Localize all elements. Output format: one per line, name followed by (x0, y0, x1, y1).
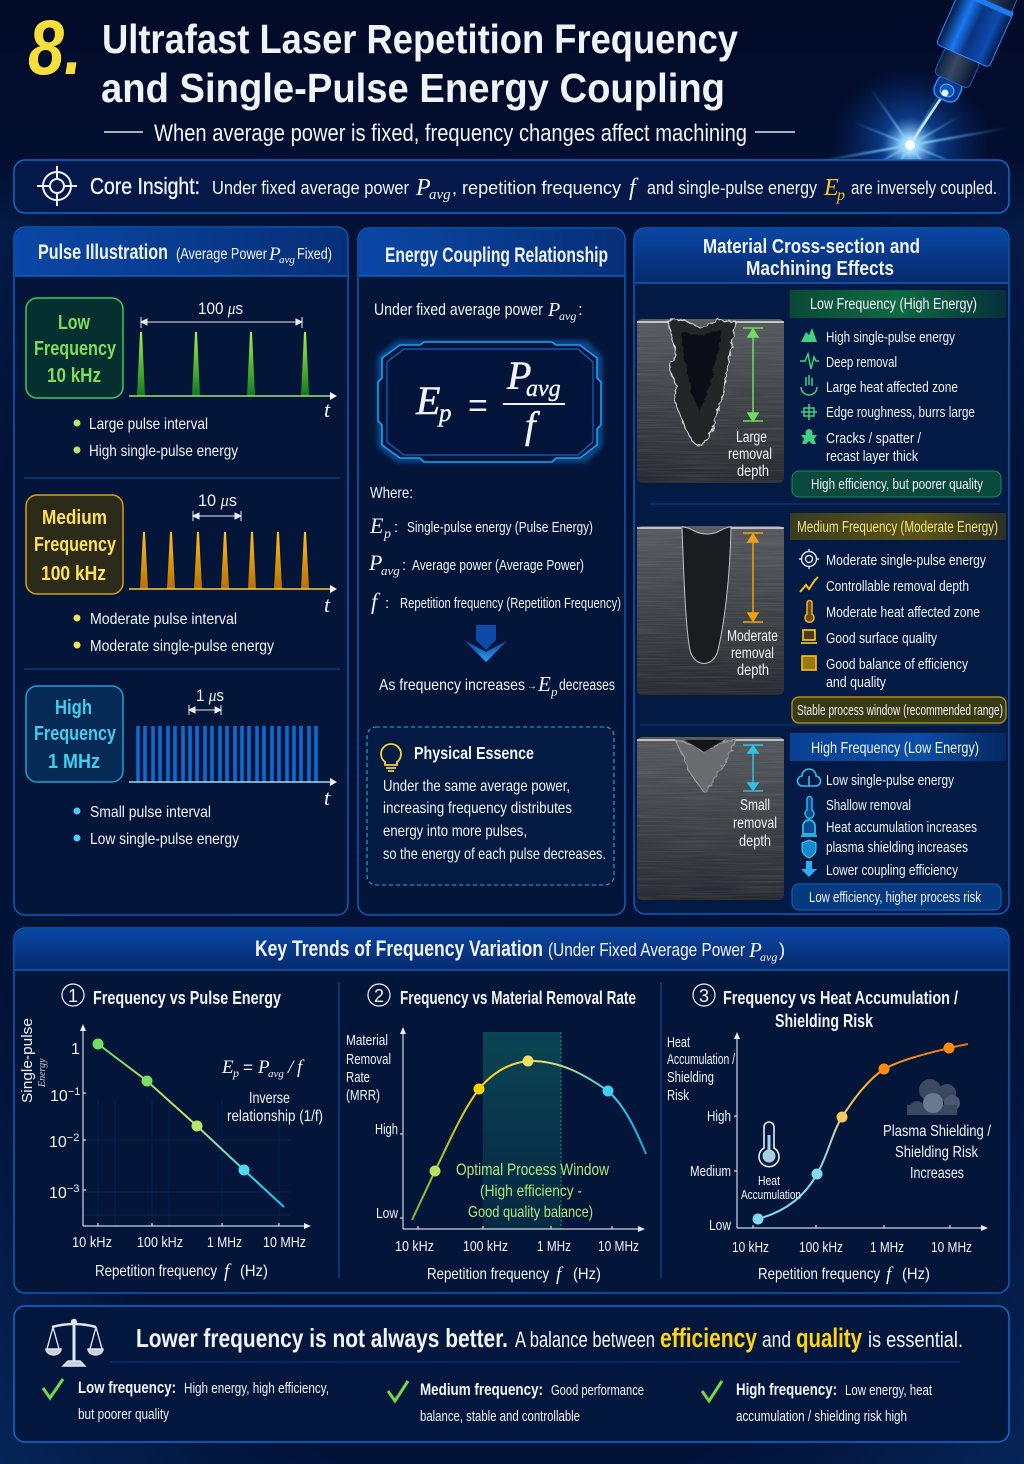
chart: frequency vs pulse energy: p (232, 1066, 239, 1080)
formula box (378, 342, 601, 462)
high frequency effects list: Low single-pulse energy (826, 772, 954, 789)
chart: frequency vs heat accumulation: Shielding (667, 1070, 714, 1086)
medium frequency label: Frequency (34, 534, 117, 556)
high frequency label: 1 MHz (48, 751, 100, 773)
formula box: avg (526, 376, 561, 402)
heading: key trends: Key Trends of Frequency Variation (255, 936, 543, 961)
chart: frequency vs heat accumulation: Shielding Risk (895, 1144, 978, 1161)
formula intro: Under fixed average power (374, 300, 543, 319)
conclusion headline: and (762, 1327, 791, 1352)
chart: frequency vs heat accumulation: Heat (758, 1173, 780, 1188)
subtitle: When average power is fixed, frequency changes affect machining (154, 120, 747, 147)
low frequency strip heading (790, 290, 1006, 318)
high frequency takeaway (702, 1380, 932, 1425)
frequency increases note (379, 672, 615, 699)
heading: pulse illustration: Pulse Illustration (38, 241, 168, 264)
conclusion headline: Lower frequency is not always better. (136, 1323, 508, 1353)
core insight text: E (823, 175, 839, 201)
icon: shield (802, 840, 816, 858)
core insight text (90, 173, 997, 204)
chart: frequency vs pulse energy: / (287, 1057, 295, 1078)
low frequency takeaway: Low frequency: (78, 1378, 176, 1397)
panel: key trends (14, 928, 1009, 1293)
low frequency effects list: Edge roughness, burrs large (826, 404, 975, 421)
cross-section: medium frequency (637, 526, 784, 695)
medium frequency effects list: Controllable removal depth (826, 578, 969, 595)
medium frequency pulse chart: 10 μs (198, 491, 237, 510)
medium frequency bullets (74, 611, 274, 655)
high frequency takeaway: High frequency: (736, 1380, 837, 1399)
high frequency strip heading (790, 733, 1006, 761)
icon: edge roughness (801, 404, 817, 420)
panel: material cross-section (634, 228, 1009, 914)
low frequency label (26, 298, 123, 398)
main title: and Single-Pulse Energy Coupling (101, 65, 725, 111)
cross-section: high frequency (637, 737, 784, 900)
chart: frequency vs pulse energy: f (224, 1261, 232, 1282)
low frequency effects list: Large heat affected zone (826, 379, 958, 396)
heading: key trends: P (748, 938, 762, 962)
chart: frequency vs heat accumulation: Shielding Risk (775, 1011, 874, 1031)
low frequency bullets: High single-pulse energy (89, 443, 238, 460)
chart: frequency vs material removal rate: Rate (346, 1069, 370, 1086)
high frequency pulse chart: t (324, 785, 331, 810)
cross-section: low frequency: removal (728, 446, 772, 463)
cross-section: high frequency: Small (740, 797, 770, 814)
icon: light bulb (381, 744, 401, 771)
high frequency bullets: Low single-pulse energy (90, 831, 239, 848)
medium frequency bullets: Moderate single-pulse energy (90, 638, 274, 655)
chart: frequency vs pulse energy: Energy (37, 1058, 48, 1088)
high frequency summary pill (792, 884, 1001, 910)
core insight text: repetition frequency (462, 177, 622, 198)
chart: frequency vs pulse energy: relationship (1/f) (227, 1108, 323, 1125)
chart: frequency vs pulse energy: 1 (68, 986, 78, 1006)
formula box: E (415, 378, 440, 423)
medium frequency label: 100 kHz (41, 563, 106, 585)
high frequency effects list: Shallow removal (826, 797, 911, 814)
heading: material cross-section: Material Cross-section and (703, 236, 920, 258)
chart: frequency vs heat accumulation: Heat (667, 1035, 690, 1051)
chart: frequency vs material removal rate: Repetition frequency (427, 1266, 549, 1283)
core insight text: f (629, 175, 639, 201)
chart: frequency vs pulse energy: Inverse (249, 1090, 290, 1107)
chart: frequency vs heat accumulation: Plasma Shielding / (883, 1123, 992, 1140)
chart: frequency vs material removal rate: Good quality balance) (468, 1204, 593, 1221)
heading: key trends: ) (779, 939, 785, 960)
medium frequency effects list: Moderate heat affected zone (826, 604, 980, 621)
icon: balance box (802, 656, 816, 670)
icon: cracks splatter (801, 429, 817, 444)
high frequency strip heading: High Frequency (Low Energy) (811, 740, 979, 757)
core insight text: p (836, 187, 845, 204)
core insight text: and single-pulse energy (647, 177, 818, 198)
medium frequency effects list (799, 549, 986, 691)
frequency increases note: decreases (559, 677, 615, 694)
chart: frequency vs heat accumulation: 3 (699, 986, 709, 1006)
low frequency bullets: Large pulse interval (89, 416, 208, 433)
chart: frequency vs pulse energy: Single-pulse (19, 1018, 36, 1103)
definitions (368, 485, 621, 614)
chart: frequency vs material removal rate: (MRR) (346, 1087, 380, 1104)
definitions: P (368, 550, 382, 575)
medium frequency effects list: Moderate single-pulse energy (826, 552, 986, 569)
high frequency takeaway: accumulation / shielding risk high (736, 1409, 907, 1425)
chart: frequency vs pulse energy: P (257, 1057, 270, 1078)
cross-section: medium frequency: depth (737, 662, 769, 679)
chart: frequency vs pulse energy: −3 (67, 1183, 79, 1195)
medium frequency strip heading (790, 513, 1006, 540)
icon: thermometer blue (805, 796, 814, 818)
high frequency label (26, 686, 123, 782)
chart: frequency vs material removal rate: (High efficiency - (480, 1183, 582, 1200)
cross-section: medium frequency: removal (731, 645, 774, 662)
low frequency label: 10 kHz (47, 365, 101, 387)
definitions: Where: (370, 485, 413, 502)
high frequency pulse chart (129, 686, 337, 810)
core insight text: avg (429, 187, 451, 203)
chart: frequency vs heat accumulation: f (886, 1264, 894, 1285)
chart: frequency vs heat accumulation: Medium (690, 1163, 731, 1180)
chart: frequency vs heat accumulation: Frequency vs Heat Accumulation / (723, 988, 958, 1008)
heading: pulse illustration (38, 241, 332, 266)
heading: material cross-section (703, 236, 920, 280)
icon: pulse wave (800, 354, 819, 369)
low frequency strip heading: Low Frequency (High Energy) (810, 296, 977, 313)
low frequency pulse chart: t (324, 397, 331, 422)
high frequency effects list: plasma shielding increases (826, 839, 968, 856)
chart: frequency vs material removal rate: Removal (346, 1051, 391, 1068)
heading: key trends (255, 936, 785, 964)
low frequency bullets (74, 416, 238, 460)
chart: frequency vs heat accumulation: 1 MHz (870, 1239, 904, 1256)
frequency increases note: p (550, 684, 558, 699)
chart: frequency vs heat accumulation: Risk (667, 1088, 690, 1104)
icon: balance scale (46, 1320, 103, 1366)
low frequency summary pill (792, 471, 1001, 497)
core insight text: Core Insight: (90, 173, 200, 199)
formula box: p (437, 400, 452, 427)
callout: physical essence (367, 727, 614, 885)
high frequency takeaway: Low energy, heat (845, 1383, 932, 1399)
conclusion headline (136, 1323, 963, 1353)
formula box: f (525, 405, 540, 447)
panel: conclusion (14, 1306, 1009, 1442)
medium frequency takeaway: balance, stable and controllable (420, 1409, 580, 1425)
chart: frequency vs material removal rate: High (375, 1121, 398, 1138)
chart: frequency vs pulse energy: avg (268, 1068, 284, 1080)
icon: thermometer (759, 1122, 779, 1167)
medium frequency label: Medium (42, 507, 107, 529)
icon: rising line (800, 577, 818, 592)
high frequency label: Frequency (34, 723, 117, 745)
frequency increases note: → (527, 681, 537, 692)
chart: frequency vs material removal rate: 10 MHz (598, 1238, 639, 1255)
high frequency effects list: Lower coupling efficiency (826, 862, 958, 879)
callout: physical essence: energy into more pulses, (383, 823, 527, 840)
chart: frequency vs pulse energy: 10 kHz (72, 1234, 112, 1251)
definitions: avg (381, 563, 400, 578)
callout: physical essence: Physical Essence (414, 743, 534, 763)
definitions: Repetition frequency (Repetition Frequency) (400, 595, 621, 612)
medium frequency pulse chart (129, 491, 337, 617)
chart: frequency vs heat accumulation: Low (709, 1217, 731, 1234)
medium frequency effects list: Good surface quality (826, 630, 937, 647)
chart: frequency vs pulse energy: E (221, 1057, 234, 1078)
icon: heat zone (801, 375, 817, 395)
chart: frequency vs pulse energy: = (243, 1058, 253, 1077)
medium frequency takeaway: Good performance (551, 1383, 644, 1399)
formula intro: : (578, 300, 583, 319)
chart: frequency vs material removal rate: Material (346, 1032, 388, 1049)
medium frequency effects list: Good balance of efficiency (826, 656, 968, 673)
heading: pulse illustration: P (268, 244, 281, 265)
chart: frequency vs material removal rate: Optimal Process Window (456, 1160, 610, 1179)
medium frequency effects list: and quality (826, 674, 886, 691)
conclusion headline: quality (796, 1323, 862, 1353)
high frequency bullets (74, 804, 239, 848)
medium frequency takeaway: Medium frequency: (420, 1380, 543, 1399)
conclusion headline: efficiency (660, 1323, 757, 1353)
high frequency effects list: Heat accumulation increases (826, 819, 977, 836)
chart: frequency vs heat accumulation: 10 kHz (732, 1239, 769, 1256)
definitions: : (385, 595, 389, 612)
definitions: Average power (Average Power) (412, 557, 584, 574)
chart: frequency vs heat accumulation: (Hz) (902, 1266, 930, 1283)
medium frequency label (26, 495, 123, 594)
panel: pulse illustration (14, 227, 348, 915)
heading: material cross-section: Machining Effects (746, 258, 894, 280)
chart: frequency vs pulse energy: 1 (71, 1041, 80, 1058)
icon: cloud arrow (797, 769, 821, 786)
chart: frequency vs pulse energy: 10 (50, 1088, 68, 1105)
icon: target (37, 166, 77, 206)
icon: surface quality (801, 630, 817, 643)
definitions: : (402, 557, 406, 574)
core insight text: Under fixed average power (212, 177, 409, 198)
conclusion headline: is essential. (868, 1327, 963, 1352)
icon: storm cloud (907, 1079, 960, 1115)
main title: Ultrafast Laser Repetition Frequency (102, 16, 738, 62)
medium frequency summary pill (792, 697, 1006, 723)
chart: frequency vs pulse energy: 1 MHz (207, 1234, 242, 1251)
chart: frequency vs material removal rate: 1 MHz (537, 1238, 571, 1255)
chart: frequency vs heat accumulation: Accumulation / (667, 1052, 736, 1068)
cross-section: high frequency: removal (733, 815, 777, 832)
cross-section: medium frequency: Moderate (727, 628, 778, 645)
definitions: p (383, 527, 391, 542)
medium frequency bullets: Moderate pulse interval (90, 611, 237, 628)
main title (101, 16, 738, 111)
chart: frequency vs pulse energy: Repetition frequency (95, 1263, 217, 1280)
low frequency takeaway: High energy, high efficiency, (184, 1381, 329, 1397)
heading: pulse illustration: (Average Power (176, 246, 267, 263)
heading: key trends: (Under Fixed Average Power (548, 939, 745, 960)
panel: core insight (14, 160, 1009, 213)
cross-section: low frequency: depth (737, 463, 769, 480)
core insight text: P (415, 175, 431, 201)
conclusion headline: A balance between (515, 1327, 655, 1352)
cross-section: low frequency: Large (736, 429, 767, 446)
heading: key trends: avg (760, 950, 777, 964)
low frequency effects list (800, 328, 975, 465)
cross-section: high frequency: depth (739, 833, 771, 850)
chart: frequency vs pulse energy: −1 (68, 1086, 80, 1098)
chart: frequency vs pulse energy: 10 (49, 1185, 67, 1202)
frequency increases note: As frequency increases (379, 677, 525, 694)
icon: down arrow (801, 861, 817, 877)
low frequency pulse chart (129, 299, 337, 422)
high frequency effects list (797, 769, 977, 879)
chart: frequency vs pulse energy: (Hz) (240, 1263, 268, 1280)
formula intro: avg (559, 309, 576, 323)
chart: frequency vs pulse energy: 10 MHz (263, 1234, 306, 1251)
chart: frequency vs pulse energy (19, 984, 323, 1282)
low frequency effects list: High single-pulse energy (826, 329, 955, 346)
high frequency bullets: Small pulse interval (90, 804, 211, 821)
heading: pulse illustration: avg (279, 254, 295, 266)
chart: frequency vs material removal rate: 2 (374, 986, 384, 1006)
core insight text: , (452, 178, 457, 198)
heading: pulse illustration: Fixed) (297, 246, 332, 263)
definitions: f (371, 589, 381, 614)
cross-section: low frequency (637, 319, 784, 483)
heading: energy coupling: Energy Coupling Relationship (385, 244, 608, 267)
chart: frequency vs material removal rate: (Hz) (573, 1266, 601, 1283)
panel: energy coupling relationship (358, 228, 625, 915)
low frequency pulse chart: 100 μs (198, 299, 243, 318)
icon: heat box (801, 820, 817, 836)
formula box: P (506, 353, 531, 398)
low frequency effects list: Deep removal (826, 354, 897, 371)
icon: thermometer (805, 600, 814, 622)
low frequency takeaway: but poorer quality (78, 1407, 170, 1423)
icon: target small (799, 549, 819, 569)
definitions: Single-pulse energy (Pulse Energy) (407, 519, 593, 536)
chart: frequency vs material removal rate: f (556, 1264, 564, 1285)
laser nozzle and beam (811, 0, 1024, 225)
low frequency takeaway (43, 1378, 329, 1423)
chart: frequency vs pulse energy: f (297, 1057, 305, 1078)
frequency increases note: E (537, 672, 551, 696)
high frequency label: High (55, 697, 92, 719)
callout: physical essence: increasing frequency distributes (383, 800, 572, 817)
chart: frequency vs heat accumulation (667, 984, 992, 1285)
chart: frequency vs heat accumulation: Repetition frequency (758, 1266, 880, 1283)
low frequency label: Frequency (34, 338, 117, 360)
low frequency label: Low (58, 312, 90, 334)
high frequency pulse chart: 1 μs (196, 686, 224, 705)
chart: frequency vs pulse energy: Frequency vs Pulse Energy (93, 988, 281, 1008)
low frequency effects list: Cracks / spatter / (826, 430, 922, 447)
chart: frequency vs heat accumulation: 10 MHz (931, 1239, 972, 1256)
low frequency effects list: recast layer thick (826, 448, 918, 465)
definitions: E (369, 513, 384, 538)
formula intro: P (547, 299, 560, 321)
chart: frequency vs heat accumulation: Accumulation (741, 1187, 801, 1202)
chart: frequency vs material removal rate: 100 kHz (463, 1238, 508, 1255)
chart: frequency vs material removal rate: 10 kHz (395, 1238, 434, 1255)
arrow: down chevrons (464, 625, 508, 662)
chart: frequency vs heat accumulation: 100 kHz (799, 1239, 843, 1256)
chart: frequency vs material removal rate: Low (376, 1205, 398, 1222)
medium frequency takeaway (388, 1380, 644, 1425)
formula box: = (468, 387, 488, 425)
medium frequency pulse chart: t (324, 592, 331, 617)
icon: mountain (801, 328, 817, 342)
chart: frequency vs heat accumulation: High (707, 1108, 731, 1125)
chart: frequency vs pulse energy: 100 kHz (137, 1234, 183, 1251)
title number 8: 8. (28, 3, 82, 91)
chart: frequency vs material removal rate (346, 984, 646, 1285)
chart: frequency vs pulse energy: −2 (67, 1132, 79, 1144)
callout: physical essence: Under the same average power, (383, 778, 570, 795)
chart: frequency vs pulse energy: 10 (49, 1134, 67, 1151)
definitions: : (394, 519, 398, 536)
chart: frequency vs material removal rate: Frequency vs Material Removal Rate (400, 988, 636, 1008)
callout: physical essence: so the energy of each pulse decreases. (383, 846, 606, 863)
chart: frequency vs heat accumulation: Increases (910, 1165, 964, 1182)
